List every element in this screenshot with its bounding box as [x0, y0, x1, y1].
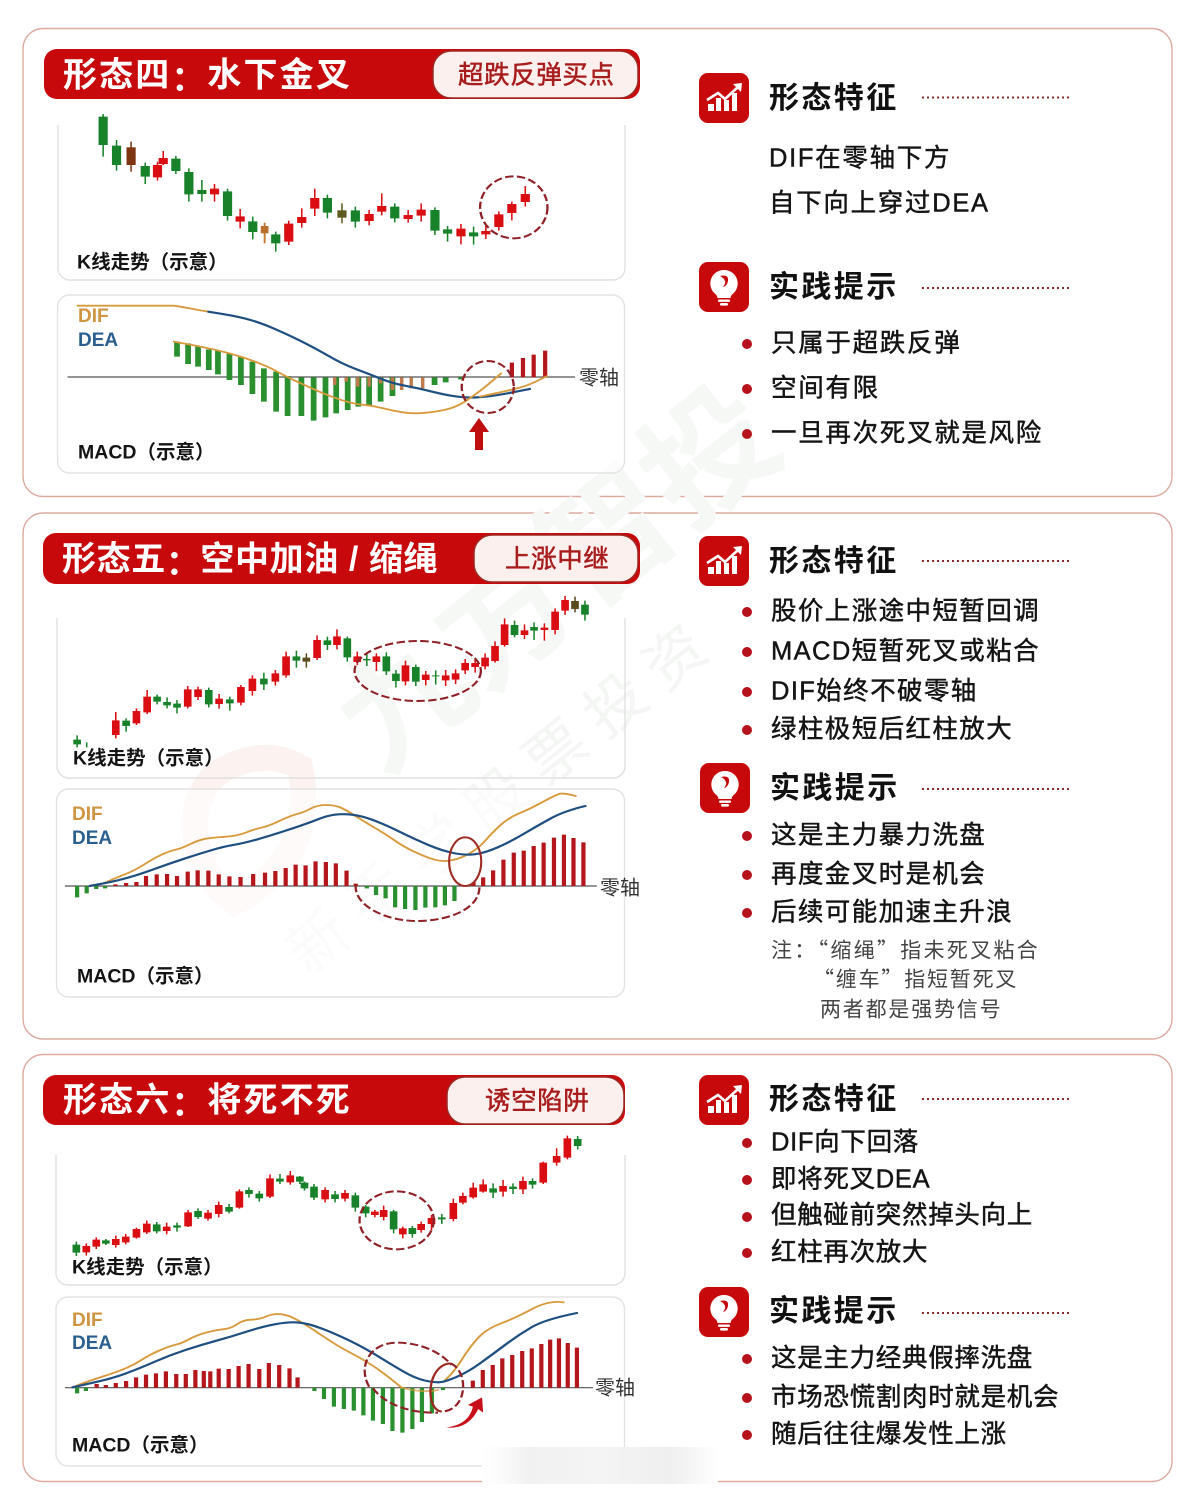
- chart: pattern five MACD: MACD（示意）: [77, 964, 214, 988]
- tips: pattern five: [700, 763, 1072, 1024]
- features: pattern five: DIF始终不破零轴: [771, 678, 978, 706]
- title: pattern four: [44, 49, 640, 100]
- tag: continuation: [474, 535, 638, 582]
- tag: continuation: 上涨中继: [505, 546, 609, 574]
- features: pattern four: 形态特征: [769, 82, 899, 115]
- tips: pattern five: 这是主力暴力洗盘: [771, 822, 986, 850]
- features: pattern six: 红柱再次放大: [771, 1238, 928, 1266]
- tag: bear trap: [447, 1077, 624, 1124]
- chart: pattern four K line: K线走势（示意）: [77, 250, 228, 274]
- tips: pattern four: 一旦再次死叉就是风险: [771, 420, 1043, 448]
- chart: pattern four K line: [58, 114, 625, 280]
- features: pattern four: 自下向上穿过DEA: [769, 190, 990, 218]
- chart: pattern four MACD: DIF: [78, 306, 109, 327]
- icon: bulb: [699, 262, 749, 312]
- chart: pattern five K line: [57, 596, 625, 778]
- chart: pattern five K line: K线走势（示意）: [73, 746, 224, 770]
- features: pattern five: MACD短暂死叉或粘合: [771, 638, 1040, 666]
- chart: pattern four MACD: [58, 295, 624, 473]
- features: pattern six: [699, 1075, 1072, 1266]
- title: pattern six: 形态六：将死不死: [63, 1076, 352, 1125]
- chart: pattern four MACD: DEA: [78, 330, 118, 351]
- chart: pattern six MACD: 零轴: [595, 1376, 635, 1400]
- tips: pattern five: 后续可能加速主升浪: [771, 898, 1013, 926]
- panel: pattern six frame: [23, 1054, 1172, 1482]
- tag: bear trap: 诱空陷阱: [485, 1088, 589, 1116]
- title: pattern five: [43, 533, 640, 584]
- tips: pattern five: 实践提示: [770, 772, 900, 805]
- tips: pattern six: 实践提示: [769, 1295, 899, 1328]
- arrow: rebound: [446, 1397, 483, 1428]
- tips: pattern four: 只属于超跌反弹: [771, 330, 961, 358]
- chart: pattern five MACD: DEA: [72, 828, 112, 849]
- tips: pattern five: 再度金叉时是机会: [771, 860, 986, 888]
- icon: chart: [699, 73, 749, 123]
- chart: pattern four MACD: 零轴: [579, 366, 619, 390]
- tips: pattern four: 空间有限: [771, 374, 880, 402]
- note: 两者都是强势信号: [820, 994, 1002, 1024]
- features: pattern six: 形态特征: [769, 1083, 899, 1116]
- tips: pattern four: 实践提示: [769, 271, 899, 304]
- tag: oversold rebound: [433, 51, 638, 98]
- watermark: 新手学股票投资: [274, 603, 732, 987]
- note: [771, 934, 1040, 1024]
- title: pattern six: [43, 1075, 625, 1125]
- features: pattern six: 但触碰前突然掉头向上: [771, 1202, 1033, 1230]
- blurred bottom smudge: [482, 1447, 718, 1484]
- tips: pattern four: [699, 262, 1072, 448]
- chart: pattern six MACD: DIF: [72, 1310, 103, 1331]
- features: pattern five: 绿柱极短后红柱放大: [771, 716, 1013, 744]
- icon: bulb: [699, 1287, 749, 1337]
- note: 注：“缩绳”指未死叉粘合: [771, 934, 1040, 964]
- chart: pattern five MACD: [56, 789, 640, 997]
- tips: pattern six: [699, 1287, 1072, 1448]
- features: pattern six: 即将死叉DEA: [771, 1166, 930, 1194]
- tips: pattern six: 这是主力经典假摔洗盘: [771, 1344, 1033, 1372]
- chart: pattern six MACD: DEA: [72, 1333, 112, 1354]
- chart: pattern five MACD: DIF: [72, 804, 103, 825]
- icon: bulb: [700, 763, 750, 813]
- chart: pattern five MACD: 零轴: [600, 876, 640, 900]
- features: pattern five: 形态特征: [769, 545, 899, 578]
- chart: pattern six K line: [56, 1136, 625, 1285]
- panel: pattern four frame: [23, 28, 1172, 496]
- features: pattern five: 股价上涨途中短暂回调: [771, 598, 1040, 626]
- icon: chart: [699, 1075, 749, 1125]
- chart: pattern six MACD: [56, 1297, 635, 1466]
- chart: pattern six MACD: MACD（示意）: [72, 1434, 208, 1456]
- tag: oversold rebound: 超跌反弹买点: [458, 62, 615, 90]
- features: pattern four: DIF在零轴下方: [769, 144, 951, 172]
- features: pattern six: DIF向下回落: [771, 1128, 919, 1156]
- note: “缠车”指短暂死叉: [813, 964, 1018, 994]
- panel: pattern five frame: [23, 513, 1172, 1039]
- title: pattern five: 形态五：空中加油 / 缩绳: [62, 535, 438, 584]
- icon: chart: [699, 536, 749, 586]
- arrow: golden cross marker: [469, 418, 489, 450]
- title: pattern four: 形态四：水下金叉: [63, 51, 352, 100]
- watermark: [195, 359, 806, 987]
- tips: pattern six: 随后往往爆发性上涨: [771, 1420, 1007, 1448]
- features: pattern five: [699, 536, 1072, 744]
- chart: pattern four MACD: MACD（示意）: [78, 440, 214, 464]
- tips: pattern six: 市场恐慌割肉时就是机会: [771, 1384, 1059, 1412]
- watermark: 九方智投: [308, 359, 806, 797]
- chart: pattern six K line: K线走势（示意）: [72, 1256, 223, 1278]
- features: pattern four: [699, 73, 1072, 218]
